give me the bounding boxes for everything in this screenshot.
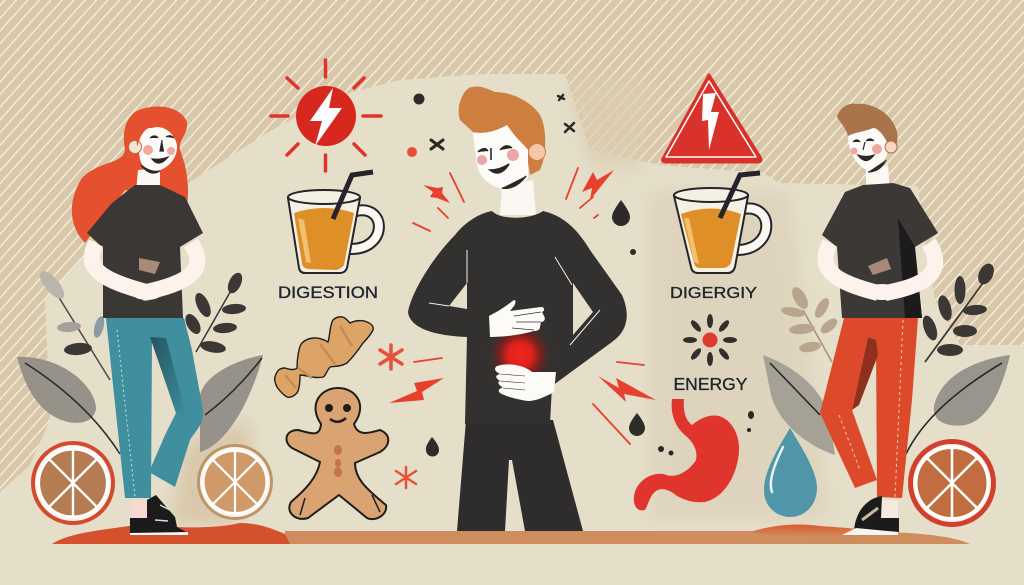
leaf stems: [25, 358, 262, 454]
face details: [141, 136, 174, 173]
gray leaf left: [17, 357, 96, 423]
jeans: [106, 318, 203, 498]
face details: [853, 139, 886, 172]
red asterisk: [380, 345, 402, 369]
man figure right: [820, 104, 938, 535]
dark dot: [630, 249, 636, 255]
arms: [825, 243, 935, 293]
sneaker: [130, 495, 188, 535]
sock: [131, 500, 147, 519]
tea cup right: [674, 173, 766, 273]
hands: [866, 284, 898, 300]
ear: [885, 141, 897, 153]
red asterisk small: [396, 467, 416, 488]
right branch: [182, 270, 246, 355]
label: energy: ENERGY: [674, 374, 748, 394]
arms: [92, 243, 197, 293]
background: tan wash top: [565, 78, 650, 170]
neck: [500, 180, 536, 215]
left plants: [17, 267, 263, 454]
scattered sparks right: [558, 95, 656, 444]
lower hand: [495, 364, 556, 401]
dark dots and crosses: [431, 140, 443, 149]
red ticks: [413, 173, 464, 362]
neck: [136, 168, 160, 192]
gray leaf right: [934, 355, 1010, 426]
gap between arm and body left: [449, 283, 467, 309]
trousers shade: [852, 337, 878, 410]
gray leaf left: [763, 355, 835, 455]
ground strip: [52, 523, 970, 544]
cheeks: [143, 145, 175, 155]
label: digergiy: DIGERGIY: [670, 285, 757, 302]
red lightning: [389, 378, 444, 403]
trousers stitching: [839, 320, 903, 498]
face: [848, 126, 888, 171]
t-shirt: [822, 183, 938, 318]
trousers: [820, 318, 918, 498]
sneaker: [842, 496, 899, 535]
dark drop: [426, 437, 439, 457]
sweater lines: [429, 250, 600, 345]
red lightning lower: [598, 376, 656, 402]
t-shirt: [87, 185, 203, 318]
dark dot: [414, 94, 424, 104]
water drop: [764, 428, 817, 517]
warning triangle: [663, 75, 761, 162]
cheeks: [477, 149, 519, 165]
tan branch: [780, 285, 840, 362]
background: right lower wash: [650, 190, 830, 520]
ear: [528, 144, 546, 160]
shirt shade: [898, 218, 922, 318]
left branch: [36, 267, 110, 380]
dark crosses: [558, 95, 574, 132]
patch on shirt: [139, 258, 160, 274]
man figure centre: [408, 87, 627, 531]
energy flower icon: [683, 314, 737, 366]
hands: [131, 284, 163, 300]
red ticks: [566, 168, 598, 218]
orange slice middle: [197, 444, 273, 520]
tea cup left: [288, 172, 379, 273]
hair: [837, 104, 898, 152]
leaf stems: [770, 363, 1002, 454]
patch on shirt: [868, 258, 891, 275]
stomach dots: [658, 411, 754, 456]
background: mound by the woman: [170, 420, 252, 525]
dark drop: [612, 200, 630, 226]
forelock: [135, 112, 183, 147]
orange slice right: [908, 439, 996, 527]
red ticks lower: [593, 362, 644, 444]
gingerbread man: [286, 388, 388, 519]
scattered sparks left: [380, 94, 464, 488]
sock: [880, 500, 898, 518]
hair: [72, 106, 188, 243]
woman figure: [72, 106, 203, 535]
right plants: [763, 261, 1010, 455]
dark drop lower: [629, 413, 645, 436]
cheeks: [850, 144, 882, 154]
sun warning icon: [271, 60, 381, 171]
red dot: [407, 147, 417, 157]
sweater: [408, 211, 627, 424]
red star: [423, 185, 450, 203]
trousers: [457, 420, 583, 531]
stomach glow: [486, 321, 554, 389]
neck: [866, 165, 890, 192]
gray leaf right: [200, 355, 263, 452]
orange slice left: [31, 441, 115, 525]
stomach icon: [634, 399, 739, 510]
ginger root: [275, 317, 373, 397]
dark branch: [920, 261, 997, 362]
face: [473, 125, 528, 188]
label: digestion: DIGESTION: [278, 284, 378, 302]
red lightning: [582, 170, 614, 200]
gap between arm and body right: [573, 283, 593, 335]
face details: [478, 146, 526, 188]
face: [139, 127, 177, 172]
hair: [459, 87, 545, 175]
ear: [128, 140, 142, 154]
upper hand: [489, 300, 545, 337]
